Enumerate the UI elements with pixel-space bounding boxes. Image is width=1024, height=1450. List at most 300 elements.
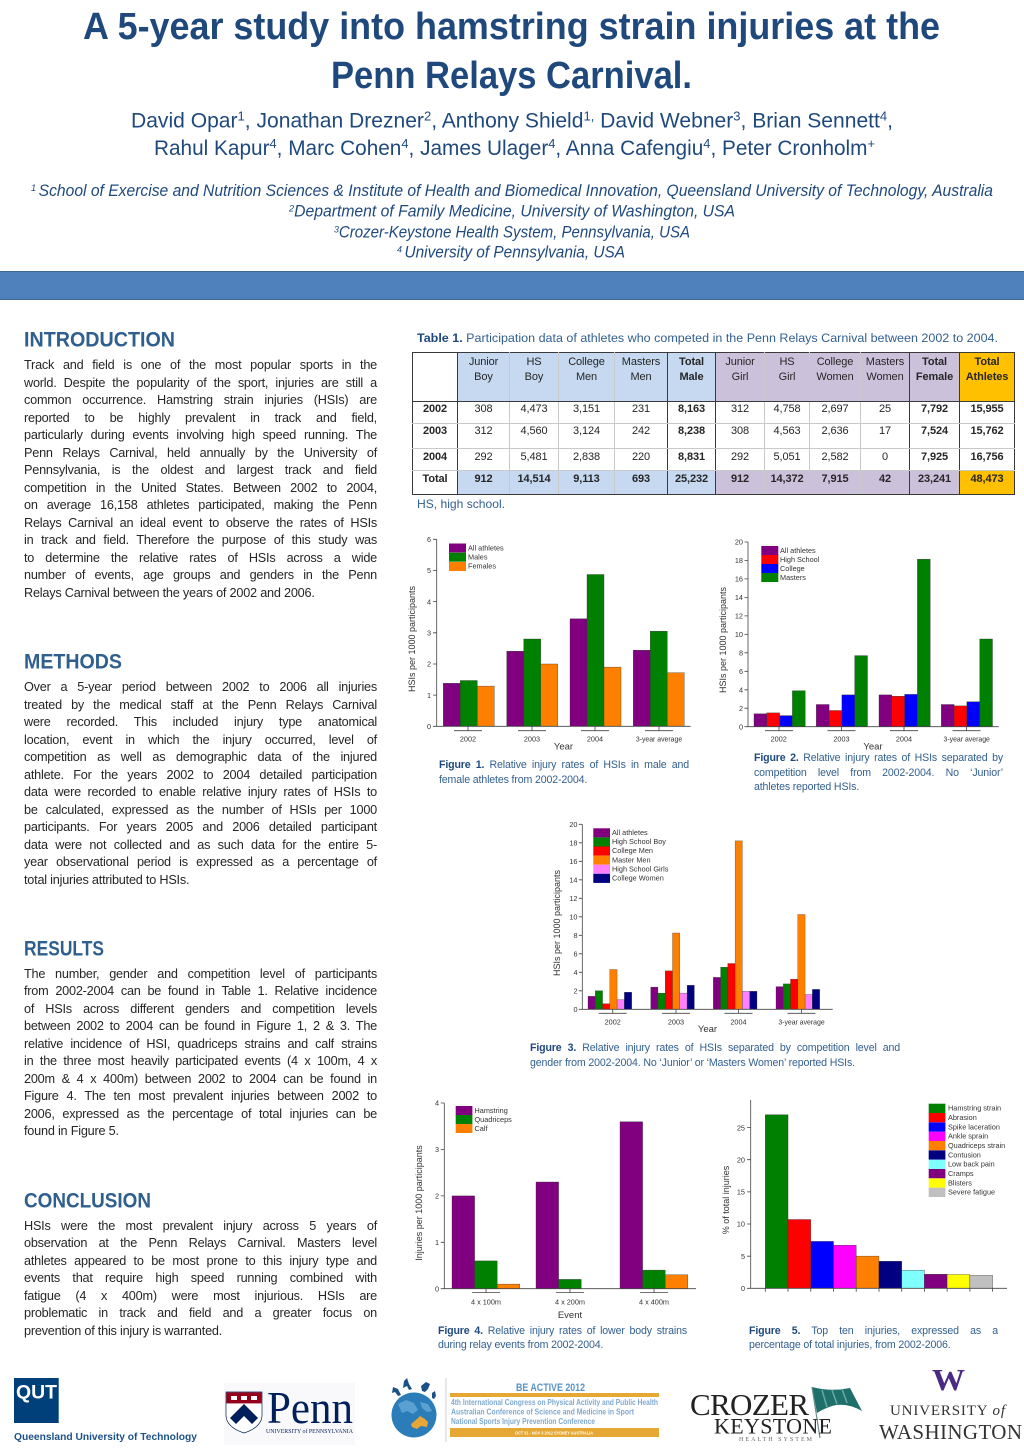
- axis labels: 12: [569, 894, 578, 903]
- table 1: participation data: Men: [630, 371, 652, 383]
- logo: University of Pennsylvania: UNIVERSITY of PENNSYLVANIA: [266, 1428, 354, 1435]
- axis labels: 0: [427, 722, 431, 731]
- axis labels: [735, 538, 743, 731]
- table 1: participation data: 912: [474, 473, 493, 485]
- header: title, authors and affiliations: [31, 6, 993, 262]
- table 1: participation data: 2,838: [573, 451, 600, 463]
- legend: College Men: [612, 846, 653, 855]
- legend: Males: [468, 552, 488, 562]
- table 1: participation data: 4,563: [773, 425, 801, 437]
- table 1: participation data: Athletes: [966, 371, 1008, 383]
- affiliations: 2: [288, 204, 295, 215]
- table 1: participation data: [412, 352, 1015, 495]
- table 1: participation data: Girl: [732, 371, 748, 383]
- table 1: participation data: Masters: [866, 356, 904, 368]
- table 1: participation data: 14,514: [517, 473, 551, 485]
- table 1: participation data: Girl: [779, 371, 795, 383]
- axis labels: 2: [573, 986, 578, 996]
- legend: All athletes: [612, 828, 648, 837]
- table 1: participation data: 693: [632, 473, 650, 485]
- text block: methods: year observational period is expressed as a percentage of: [24, 855, 377, 869]
- section heading: methods: METHODS: [24, 650, 122, 674]
- table 1: participation data: 2,697: [821, 403, 849, 415]
- axes: [744, 542, 999, 731]
- axis labels: 14: [569, 876, 578, 884]
- table 1: participation data: 7,915: [821, 473, 849, 485]
- text block: methods: athlete. For the years 2002 to 2004 detailed participation: [24, 768, 377, 782]
- authors: 4: [703, 136, 710, 151]
- table 1: participation data: Junior: [469, 356, 498, 368]
- table 1: participation data: 231: [632, 403, 650, 415]
- axis labels: 20: [735, 538, 743, 547]
- legend: [449, 544, 504, 571]
- chart: figure 1 injury rates by sex: 2003: [524, 735, 540, 744]
- caption: figure 2: competition level from 2002-2004. No ‘Junior’: [754, 766, 1003, 778]
- text block: results: [24, 966, 377, 1138]
- text block: methods: data were recorded to enable relative injury rates of HSIs to: [24, 785, 377, 799]
- logo: University of Washington: [879, 1362, 1022, 1444]
- axis labels: 0: [741, 1284, 745, 1293]
- affiliations: School of Exercise and Nutrition Sciences & Institute of Health and Biomedical Innovation, Queensland University of Technology, Australia: [39, 182, 993, 200]
- axis labels: 3: [435, 1145, 439, 1154]
- caption: figure 2: athletes reported HSIs.: [754, 781, 859, 793]
- logo: Be Active 2012 conference: OCT 31 - NOV 3 2012 SYDNEY AUSTRALIA: [515, 1430, 594, 1436]
- table 1: participation data: Women: [816, 371, 854, 383]
- text block: introduction: Pennsylvania, is the oldest and largest track and field: [24, 463, 377, 477]
- legend: Cramps: [948, 1169, 974, 1178]
- text block: conclusion: athletes appeared to be most prone to this injury type and: [24, 1254, 377, 1268]
- table 1: participation data: 15,955: [970, 403, 1004, 415]
- axis labels: 0: [435, 1284, 439, 1293]
- chart: figure 1 injury rates by sex: [407, 535, 691, 752]
- table 1: participation data: 2,582: [821, 451, 849, 463]
- text block: conclusion: events that require high speed running combined with: [24, 1271, 377, 1285]
- table 1: participation data: 8,831: [678, 451, 705, 463]
- table 1: participation data: Junior: [725, 356, 755, 368]
- table 1: participation data: 2002: [423, 403, 447, 415]
- table 1: participation data: 15,762: [970, 425, 1004, 437]
- logo: Be Active 2012 conference: BE ACTIVE 2012: [516, 1382, 585, 1394]
- axes: [433, 539, 691, 731]
- section heading: results: RESULTS: [24, 938, 104, 960]
- table 1: participation data: Men: [576, 371, 597, 383]
- caption: figure 1: [439, 759, 689, 786]
- axis labels: 0: [573, 1005, 578, 1014]
- authors: 2: [424, 108, 431, 124]
- logo: Be Active 2012 conference: National Sports Injury Prevention Conference: [451, 1417, 595, 1426]
- text block: methods: Over a 5-year period between 2002 to 2006 all injuries: [24, 680, 377, 694]
- axis labels: 6: [427, 535, 431, 544]
- legend: High School Girls: [612, 864, 669, 873]
- axis labels: 14: [735, 593, 743, 602]
- table 1: participation data: 312: [731, 403, 749, 415]
- text block: introduction: Relays Carnival an ideal event to observe the rates of HSIs: [24, 516, 377, 530]
- axis labels: 4: [573, 968, 578, 977]
- text block: methods: location, event in which the injury occurred, level of: [24, 732, 377, 746]
- caption: figure 5: [749, 1325, 998, 1351]
- text block: methods: be calculated, expressed as the number of HSIs per 1000: [24, 802, 377, 816]
- table 1: participation data: 42: [879, 473, 891, 485]
- table 1: participation data: 5,051: [773, 451, 801, 463]
- axis labels: 16: [569, 857, 578, 866]
- text block: introduction: number of events, age groups and genders in the Penn: [24, 568, 377, 582]
- chart: figure 1 injury rates by sex: 2004: [587, 735, 603, 744]
- logo: Crozer-Keystone Health System: CROZER: [690, 1387, 809, 1422]
- text block: introduction: on average 16,158 athletes participated, making the Penn: [24, 498, 377, 512]
- affiliations: Crozer-Keystone Health System, Pennsylvania, USA: [339, 223, 690, 241]
- table 1: participation data: 2003: [423, 425, 447, 437]
- axis labels: 6: [573, 950, 578, 958]
- text block: methods: were recorded. This included injury type anatomical: [24, 715, 377, 729]
- table 1: participation data: 292: [474, 451, 493, 463]
- text block: introduction: common occurrence. Hamstring strain injuries (HSIs) are: [24, 393, 377, 407]
- bars: [443, 574, 684, 726]
- chart: figure 4 lower body strains in relay events: [414, 1099, 696, 1321]
- text block: methods: [24, 680, 378, 886]
- axis labels: 5: [741, 1252, 745, 1261]
- table 1: participation data: 912: [731, 473, 749, 485]
- logo: Crozer-Keystone Health System: HEALTH SYSTEM: [739, 1437, 813, 1443]
- affiliations: 3: [334, 224, 340, 235]
- legend: [929, 1104, 1005, 1197]
- legend: College Women: [612, 874, 664, 882]
- logo: Queensland University of Technology: QUT: [16, 1382, 57, 1404]
- table 1: participation data: 2,636: [821, 425, 849, 437]
- axis labels: [427, 535, 431, 731]
- axis labels: 10: [737, 1220, 745, 1229]
- text block: results: 2006, expressed as the percentage of total injuries can be: [24, 1106, 377, 1120]
- text block: introduction: competition in the United States. Between 2002 to 2004,: [24, 480, 377, 494]
- legend: Calf: [474, 1124, 488, 1133]
- affiliations: [31, 182, 993, 262]
- authors: David Webner: [594, 110, 733, 132]
- table 1: participation data: 7,524: [921, 425, 948, 437]
- authors: 4: [548, 136, 555, 151]
- table 1: participation data: 308: [731, 425, 749, 437]
- text block: introduction: to determine the relative rates of HSIs across a wide: [24, 550, 377, 564]
- table 1: participation data: 3,151: [573, 403, 600, 415]
- bars: [452, 1122, 688, 1289]
- chart: figure 2 injury rates by competition level: 2002: [771, 735, 787, 744]
- text block: results: in the three most heavily participated events (4 x 100m, 4 x: [24, 1054, 377, 1068]
- table 1: participation data: 16,756: [970, 451, 1004, 463]
- table 1: participation data: 7,925: [921, 451, 948, 463]
- axis labels: 18: [569, 838, 578, 848]
- logo: Queensland University of Technology: Queensland University of Technology: [14, 1431, 197, 1443]
- legend: [761, 546, 820, 582]
- axis labels: 1: [427, 691, 431, 700]
- chart: figure 1 injury rates by sex: 3-year average: [636, 737, 682, 744]
- table 1: participation data: 2004: [423, 451, 447, 463]
- authors: 3: [733, 108, 741, 124]
- text block: conclusion: problematic in track and field and a greater focus on: [24, 1306, 377, 1320]
- logo: Be Active 2012 conference: 4th International Congress on Physical Activity and Public Health: [451, 1398, 658, 1407]
- text block: conclusion: observation at the Penn Relays Carnival. Masters level: [24, 1236, 377, 1250]
- chart: figure 3 injury rates by level and gender: 3-year average: [778, 1019, 825, 1026]
- legend: Master Men: [612, 855, 651, 864]
- chart: figure 2 injury rates by competition level: 3-year average: [944, 737, 990, 744]
- table 1: participation data: 7,792: [921, 403, 948, 415]
- text block: results: The number, gender and competition level of participants: [24, 966, 377, 980]
- text block: conclusion: [24, 1218, 378, 1338]
- section heading: conclusion: CONCLUSION: [24, 1190, 151, 1212]
- chart: figure 3 injury rates by level and gender: 2002: [605, 1017, 621, 1026]
- axis labels: 15: [737, 1188, 745, 1197]
- affiliations: 4: [397, 245, 405, 256]
- table 1: participation data: Female: [916, 371, 953, 383]
- bars: [754, 559, 992, 727]
- legend: Quadriceps strain: [948, 1141, 1005, 1150]
- authors: +: [867, 136, 875, 151]
- authors: Rahul Kapur: [154, 137, 271, 160]
- caption: figure 1: female athletes from 2002-2004.: [439, 774, 587, 786]
- text block: methods: participants. For years 2005 and 2006 detailed participant: [24, 820, 377, 834]
- logo: Queensland University of Technology: [14, 1378, 197, 1443]
- axis labels: 20: [737, 1155, 745, 1164]
- table footnote: HS, high school.: [417, 497, 505, 511]
- legend: All athletes: [780, 546, 816, 555]
- affiliations: University of Pennsylvania, USA: [405, 244, 625, 262]
- axis labels: 8: [573, 931, 578, 940]
- table 1: participation data: 220: [632, 451, 650, 463]
- text block: methods: total injuries attributed to HSIs.: [24, 872, 189, 886]
- blue banner: [0, 272, 1024, 300]
- authors: David Opar: [131, 110, 237, 132]
- table 1: participation data: 8,163: [678, 403, 705, 415]
- authors: 4: [270, 136, 277, 151]
- logo: Crozer-Keystone Health System: KEYSTONE: [714, 1414, 832, 1438]
- legend: Severe fatigue: [948, 1188, 995, 1197]
- table 1: participation data: HS: [779, 356, 795, 368]
- authors: 4: [401, 136, 409, 151]
- chart: figure 2 injury rates by competition level: HSIs per 1000 participants: [718, 586, 728, 693]
- title: [83, 6, 940, 97]
- caption: figure 3: gender from 2002-2004. No ‘Junior’ or ‘Masters Women’ reported HSIs.: [530, 1056, 855, 1068]
- axis labels: 25: [737, 1123, 745, 1132]
- table 1: participation data: 25: [879, 403, 891, 415]
- legend: Quadriceps: [474, 1115, 512, 1124]
- text block: introduction: reported to be highly prevalent in track and field,: [24, 410, 377, 424]
- axis labels: 3: [427, 628, 431, 638]
- chart: figure 5 top ten injuries: % of total injuries: [721, 1165, 731, 1234]
- table 1: participation data: 5,481: [520, 451, 548, 463]
- table 1: participation data: 9,113: [573, 473, 600, 485]
- logo: University of Pennsylvania: [224, 1382, 355, 1445]
- axis labels: 6: [739, 667, 743, 676]
- text block: results: of HSIs across different genders and competition levels: [24, 1002, 377, 1016]
- chart: figure 2 injury rates by competition level: [718, 538, 999, 752]
- axis labels: 4: [427, 597, 431, 606]
- legend: High School: [780, 555, 820, 564]
- table 1: participation data: 14,372: [770, 473, 804, 485]
- axis labels: 20: [569, 820, 578, 829]
- axis labels: 1: [435, 1238, 439, 1247]
- chart: figure 4 lower body strains in relay events: Injuries per 1000 participants: [414, 1145, 424, 1261]
- table 1: participation data: 23,241: [918, 473, 951, 485]
- chart: figure 4 lower body strains in relay events: Event: [558, 1310, 583, 1321]
- caption: figure 5: percentage of total injuries, from 2002-2006.: [749, 1339, 951, 1351]
- caption: figure 3: [530, 1042, 900, 1068]
- chart: figure 4 lower body strains in relay events: 4 x 400m: [639, 1297, 669, 1306]
- table 1 caption: Table 1. Participation data of athletes who competed in the Penn Relays Carnival between 2002 to 2004.: [417, 331, 998, 345]
- logo: University of Washington: UNIVERSITY of: [890, 1403, 1007, 1419]
- authors: , Anthony Shield: [431, 110, 583, 132]
- legend: Masters: [780, 573, 806, 582]
- chart: figure 1 injury rates by sex: 2002: [460, 735, 476, 744]
- legend: High School Boy: [612, 837, 666, 846]
- legend: Spike laceration: [948, 1122, 1000, 1131]
- text block: introduction: Track and field is one of the most popular sports in the: [24, 358, 377, 372]
- table 1: participation data: 8,238: [678, 425, 705, 437]
- axis labels: 2: [739, 704, 743, 713]
- text block: results: found in Figure 5.: [24, 1124, 119, 1138]
- legend: Blisters: [948, 1178, 972, 1187]
- table 1: participation data: HS: [526, 356, 542, 368]
- axis labels: 0: [739, 722, 743, 731]
- caption: figure 3: Figure 3. Relative injury rates of HSIs separated by competition level and: [530, 1042, 900, 1054]
- axes: [441, 1103, 696, 1292]
- caption: figure 2: Figure 2. Relative injury rates of HSIs separated by: [754, 752, 1003, 764]
- authors: , Anna Cafengiu: [555, 137, 703, 160]
- axis labels: 5: [427, 566, 431, 575]
- table 1: participation data: 292: [731, 451, 749, 463]
- authors: ,: [887, 110, 893, 132]
- table 1: participation data: Masters: [622, 356, 660, 368]
- legend: Hamstring strain: [948, 1104, 1001, 1113]
- axis labels: 10: [569, 912, 578, 922]
- text block: introduction: [24, 358, 378, 600]
- table 1: participation data: Women: [866, 371, 904, 383]
- chart: figure 1 injury rates by sex: HSIs per 1000 participants: [407, 585, 417, 692]
- axis labels: 2: [427, 660, 431, 669]
- chart: figure 2 injury rates by competition level: Year: [863, 742, 883, 752]
- table 1: participation data: 242: [632, 425, 650, 437]
- axis labels: 8: [739, 648, 743, 658]
- table 1: participation data: 17: [879, 425, 891, 437]
- caption: figure 4: Figure 4. Relative injury rates of lower body strains: [438, 1325, 687, 1337]
- legend: Low back pain: [948, 1160, 995, 1169]
- text block: results: Figure 4. The ten most prevalent injuries between 2002 to: [24, 1089, 377, 1103]
- table 1: participation data: Total: [975, 356, 999, 368]
- legend: Ankle sprain: [948, 1132, 988, 1141]
- axis labels: 4: [435, 1099, 439, 1108]
- axis labels: 10: [735, 630, 743, 639]
- chart: figure 3 injury rates by level and gender: Year: [698, 1024, 717, 1035]
- text block: methods: treated by the medical staff at the Penn Relays Carnival: [24, 698, 377, 712]
- axes: [747, 1100, 1007, 1292]
- chart: figure 3 injury rates by level and gender: 2004: [730, 1017, 747, 1026]
- caption: figure 5: Figure 5. Top ten injuries, expressed as a: [749, 1325, 998, 1337]
- chart: figure 2 injury rates by competition level: 2003: [833, 735, 850, 744]
- caption: figure 4: during relay events from 2002-2004.: [438, 1339, 603, 1351]
- logo: University of Washington: W: [932, 1362, 965, 1397]
- section heading: introduction: INTRODUCTION: [24, 329, 175, 352]
- table 1: participation data: 0: [882, 451, 888, 463]
- axis labels: 2: [435, 1192, 439, 1201]
- caption: figure 4: [438, 1325, 687, 1351]
- chart: figure 3 injury rates by level and gender: HSIs per 1000 participants: [552, 869, 562, 976]
- chart: figure 4 lower body strains in relay events: 4 x 100m: [471, 1297, 501, 1306]
- text block: conclusion: fatigue (4 x 400m) were most injurious. HSIs are: [24, 1288, 377, 1302]
- text block: introduction: in track and field. Therefore the purpose of this study was: [24, 533, 377, 547]
- caption: figure 1: Figure 1. Relative injury rates of HSIs in male and: [439, 759, 689, 771]
- text block: introduction: Penn Relays Carnival, held annually by the University of: [24, 446, 377, 460]
- table 1: participation data: College: [817, 356, 853, 368]
- table 1: participation data: 4,758: [773, 403, 801, 415]
- logo: University of Washington: WASHINGTON: [879, 1420, 1022, 1444]
- affiliations: 1: [31, 183, 39, 194]
- bars: [588, 841, 820, 1009]
- text block: methods: competition as well as demographic data of the injured: [24, 750, 377, 764]
- table 1: participation data: 4,473: [520, 403, 548, 415]
- text block: results: relative incidence of HSI, quadriceps strains and calf strains: [24, 1036, 377, 1050]
- table 1: participation data: Total: [679, 356, 704, 368]
- authors: , Peter Cronholm: [710, 137, 867, 160]
- logo: University of Pennsylvania: Penn: [267, 1382, 353, 1433]
- axes: [579, 824, 833, 1013]
- text block: methods: data were not collected and as such data for the entire 5-: [24, 838, 377, 852]
- axis labels: 4: [739, 686, 743, 694]
- legend: [456, 1106, 512, 1133]
- text block: introduction: particularly during events involving high speed running. The: [24, 428, 377, 442]
- legend: Abrasion: [948, 1113, 977, 1122]
- title: Penn Relays Carnival.: [331, 55, 692, 97]
- table 1: participation data: 3,124: [573, 425, 600, 437]
- authors: , James Ulager: [409, 137, 548, 160]
- logo: Crozer-Keystone Health System: [690, 1387, 862, 1443]
- text block: conclusion: HSIs were the most prevalent injury across 5 years of: [24, 1218, 377, 1232]
- affiliations: Department of Family Medicine, University of Washington, USA: [294, 203, 735, 221]
- axis labels: [435, 1099, 439, 1293]
- axis labels: [737, 1123, 745, 1293]
- logo: Be Active 2012 conference: Australian Conference of Science and Medicine in Sport: [451, 1408, 634, 1416]
- text block: results: from 2002-2004 can be found in Table 1. Relative incidence: [24, 984, 377, 998]
- table 1: participation data: 25,232: [675, 473, 708, 485]
- title: A 5-year study into hamstring strain injuries at the: [83, 6, 940, 48]
- legend: College: [780, 564, 805, 573]
- chart: figure 5 top ten injuries: [721, 1100, 1007, 1293]
- chart: figure 2 injury rates by competition level: 2004: [896, 735, 912, 744]
- text block: results: between 2002 to 2004 can be found in Figure 1, 2 & 3. The: [24, 1019, 377, 1033]
- axis labels: 16: [735, 575, 743, 584]
- authors: , Marc Cohen: [277, 137, 401, 160]
- authors: , Brian Sennett: [741, 110, 880, 132]
- axis labels: [569, 820, 578, 1014]
- chart: figure 3 injury rates by level and gender: [552, 820, 833, 1035]
- chart: figure 4 lower body strains in relay events: 4 x 200m: [555, 1297, 585, 1306]
- table 1: participation data: Total: [922, 356, 947, 368]
- chart: figure 1 injury rates by sex: Year: [554, 742, 573, 752]
- axis labels: 18: [735, 556, 743, 565]
- authors: 1: [238, 108, 245, 124]
- legend: Hamstring: [474, 1106, 508, 1115]
- table 1: participation data: Male: [679, 371, 704, 383]
- axis labels: 12: [735, 612, 743, 621]
- caption: figure 2: [754, 752, 1004, 793]
- logo: Be Active 2012 conference: [392, 1378, 659, 1442]
- text block: results: 200m & 4 x 400m) between 2002 to 2004 can be found in: [24, 1072, 377, 1086]
- legend: All athletes: [468, 544, 504, 552]
- table 1: participation data: Total: [423, 473, 447, 485]
- table 1: participation data: 4,560: [520, 425, 548, 437]
- authors: 1,: [583, 108, 594, 124]
- text block: conclusion: prevention of this injury is warranted.: [24, 1324, 222, 1338]
- table 1: participation data: 48,473: [970, 473, 1004, 485]
- legend: Females: [468, 562, 496, 571]
- chart: figure 3 injury rates by level and gender: 2003: [668, 1017, 684, 1026]
- table 1: participation data: 308: [474, 403, 493, 415]
- authors: , Jonathan Drezner: [245, 110, 424, 132]
